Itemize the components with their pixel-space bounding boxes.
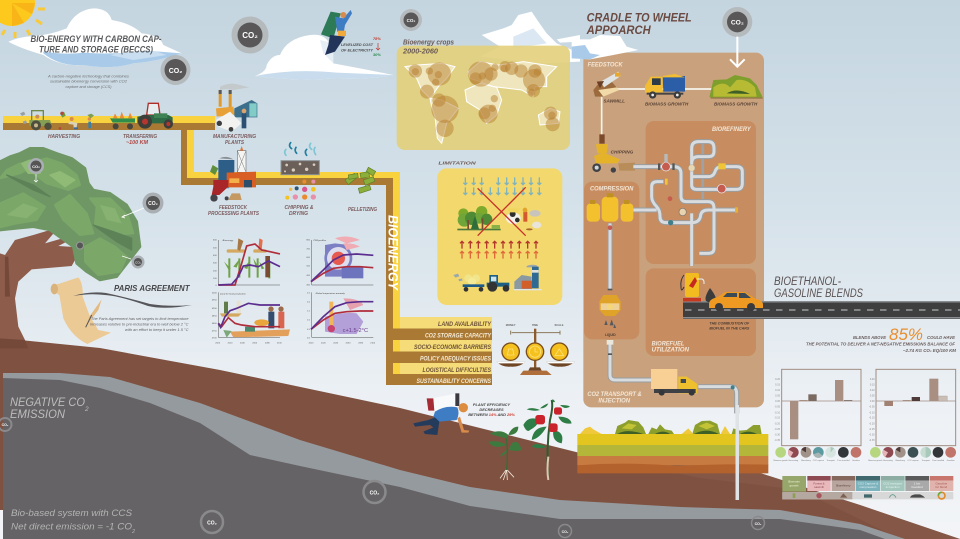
- heading: bioethanol gasoline blends: BIOETHANOL-: [774, 276, 841, 288]
- ground: soil slope: [0, 338, 960, 539]
- label: chipping: CHIPPING: [611, 149, 634, 154]
- text: blends above 85%: COULD HAVE: [927, 335, 956, 340]
- bar chart right: 0.20: [870, 378, 875, 381]
- factory: [514, 265, 542, 290]
- pie legend left: 1 km travelled: [837, 459, 850, 462]
- label: feedstock processing plants: FEEDSTOCK: [219, 205, 248, 211]
- balance scale: money, time, scale: MONEY: [506, 323, 516, 327]
- heading: negative CO2 emission: [10, 395, 89, 421]
- bar chart right: -0.05: [869, 406, 875, 409]
- heading: negative CO2 emission: NEGATIVE CO: [10, 395, 85, 409]
- bar chart right: 0.15: [870, 384, 875, 387]
- pie legend left: [774, 447, 861, 462]
- chart: global temperature anomaly: 2000: [309, 342, 314, 344]
- chart: CO2 profiles: 700: [306, 248, 311, 250]
- bar chart right: 0.00: [870, 400, 875, 403]
- chart: global temperature anomaly: 2060: [346, 342, 351, 344]
- bar chart left: -0.10: [774, 411, 781, 414]
- bars: six limitations: LOGISTICAL DIFFICULTIES: [422, 367, 491, 374]
- label: combustion: THE COMBUSTION OF: [709, 322, 750, 326]
- heading: limitation: LIMITATION: [438, 161, 476, 167]
- bar chart right: 0.05: [870, 395, 875, 398]
- heading: bioethanol gasoline blends: [774, 276, 863, 300]
- bar chart right: [869, 369, 956, 446]
- chart: bioenergy: [213, 238, 280, 287]
- CO2 bubble right of tree: [122, 192, 164, 218]
- CO2 bubbles underground: CO₂: [755, 522, 762, 526]
- chart: land for food production: 2000: [215, 342, 221, 344]
- bar chart left: 0.00: [775, 400, 781, 403]
- table of life-cycle stages: compression: [860, 485, 877, 489]
- label: biorefinery: BIOREFINERY: [712, 126, 751, 133]
- label: CO2 transport and injection: INJECTION: [598, 399, 631, 405]
- pellets icon: [345, 167, 376, 193]
- subpanel: compression: [584, 182, 639, 339]
- pie legend right: CO2 capture: [907, 459, 920, 462]
- charts: four scenario line charts: [212, 237, 376, 344]
- CO2 bubble top centre: [232, 16, 268, 54]
- label: biomass growth 1: BIOMASS GROWTH: [645, 102, 689, 107]
- ground: rock layers: [0, 373, 905, 539]
- text: plant efficiency: DECREASES: [479, 407, 504, 412]
- small CO2 bubble lower right of tree: [122, 256, 144, 268]
- small plant: [488, 427, 522, 480]
- pipe valves: [658, 154, 738, 225]
- balance scale: money, time, scale: [497, 323, 575, 375]
- cloud: levelized cost: [255, 35, 393, 80]
- panel: cradle to wheel: [583, 7, 764, 413]
- chart: global temperature anomaly: c+1.5-2°C: [343, 328, 368, 334]
- levelized cost of electricity: 78%: [373, 36, 381, 41]
- swoosh under Paris Agreement: [73, 292, 192, 308]
- tractor with hay: [453, 274, 509, 292]
- chart: bioenergy: Bioenergy: [223, 240, 234, 242]
- heading: negative CO2 emission: 2: [84, 406, 89, 413]
- bars: six limitations: SOCIO-ECONOMIC BARRIERS: [414, 344, 491, 351]
- bar chart left: -0.25: [774, 428, 781, 431]
- chart: land for food production: 4800: [212, 323, 217, 325]
- CO2 bubble on tree top: CO₂: [32, 164, 40, 169]
- CO2 bubble top of map: [400, 9, 422, 31]
- label: transfering: [123, 134, 157, 146]
- road: [683, 301, 960, 319]
- chart: land for food production: 2060: [252, 342, 258, 344]
- label: feedstock processing plants: [208, 205, 259, 217]
- table of life-cycle stages: travelled: [911, 485, 923, 489]
- CO2 bubble in branch: [76, 242, 84, 249]
- text: Paris Agreement body: increases relative to pre-industrial era to well below 2 °C: [90, 322, 189, 326]
- feedstock processing plant icon: [210, 146, 256, 202]
- text: definition: [47, 74, 129, 89]
- pipe into the ground: [736, 405, 739, 500]
- heading: bioenergy crops: [402, 40, 454, 56]
- label: combustion: [709, 322, 750, 330]
- orange car: [709, 292, 763, 311]
- harvesters: [59, 112, 94, 130]
- chart: global temperature anomaly: 1.5: [307, 311, 311, 313]
- tomato plant: [523, 399, 572, 480]
- text: blends above 85%: 85%: [889, 325, 923, 344]
- label: CO2 transport and injection: CO2 TRANSPORT &: [587, 392, 642, 398]
- levelized cost of electricity: [341, 36, 381, 57]
- label: compression: COMPRESSION: [590, 187, 634, 193]
- pie legend left: CO2 capture: [813, 459, 825, 462]
- levelized cost of electricity: OF ELECTRICITY: [341, 48, 373, 52]
- bars: six limitations: POLICY ADEQUACY ISSUES: [420, 356, 491, 362]
- chart: global temperature anomaly: 2020: [321, 342, 327, 344]
- label: chipping and drying: DRYING: [289, 211, 308, 217]
- text: plant efficiency: PLANT EFFICIENCY: [473, 402, 510, 407]
- CO2 bubble with arrow: [722, 7, 752, 67]
- label: biomass growth 2: BIOMASS GROWTH: [714, 102, 758, 107]
- bar chart left: 0.10: [775, 389, 781, 392]
- table of life-cycle stages: CO2 transport: [883, 481, 902, 485]
- chart: land for food production: 5000: [212, 293, 217, 295]
- bar chart right: -0.10: [869, 411, 875, 414]
- text: Paris Agreement body: The Paris Agreement has set targets to limit temperature: [91, 317, 188, 321]
- manufacturing plant icon: [216, 84, 257, 132]
- label: feedstock: FEEDSTOCK: [588, 62, 623, 69]
- text: Paris Agreement body: with an effort to keep it under 1.5 °C: [125, 328, 189, 332]
- text: bio-based system: [11, 508, 135, 535]
- table of life-cycle stages: [782, 476, 953, 499]
- chart: global temperature anomaly: 2.5: [307, 293, 311, 295]
- label: manufacturing plants: PLANTS: [225, 140, 244, 146]
- bar chart left: [774, 369, 861, 446]
- liquid CO2 tank: [599, 295, 621, 316]
- CO2 bubbles underground: [0, 418, 764, 538]
- crawling man with heavy pack: [413, 393, 469, 435]
- small tractor: [20, 111, 52, 130]
- tree: [0, 148, 140, 348]
- CO2 bubble on tree top: [28, 158, 44, 182]
- label: harvesting: HARVESTING: [48, 134, 80, 140]
- chart: CO2 profiles: 300: [306, 284, 311, 286]
- heading: bioethanol gasoline blends: GASOLINE BLENDS: [774, 288, 863, 300]
- sawmill icon: [593, 72, 621, 97]
- bar chart left: -0.20: [774, 422, 781, 425]
- table of life-cycle stages: Forest &: [813, 481, 825, 485]
- bar chart left: 0.15: [775, 384, 781, 387]
- CO2 bubbles underground: CO₂: [370, 490, 379, 496]
- chart: global temperature anomaly: 2.0: [307, 302, 311, 304]
- label: biorefuel utilization: UTILIZATION: [652, 347, 690, 353]
- label: transfering: ~100 KM: [126, 140, 149, 146]
- CO2 bubbles underground: CO₂: [207, 520, 217, 526]
- CO2 pipe to tank: [608, 223, 612, 290]
- balance scale: money, time, scale: SCALE: [554, 323, 564, 327]
- chart: global temperature anomaly: 0.5: [307, 329, 311, 331]
- label: manufacturing plants: MANUFACTURING: [213, 134, 256, 140]
- CO2 bubbles underground: CO₂: [2, 423, 9, 427]
- bar chart left: -0.05: [774, 406, 781, 409]
- table of life-cycle stages: CO2 Capture &: [858, 481, 878, 485]
- heading: negative CO2 emission: EMISSION: [10, 407, 65, 421]
- big tractor with trailer: [110, 103, 173, 129]
- chart: land for food production: [212, 292, 290, 344]
- oil drop: [706, 288, 716, 302]
- chart: land for food production: 4950: [212, 300, 217, 302]
- bar chart left: -0.15: [774, 417, 781, 420]
- heading: CRADLE TO WHEEL: [587, 11, 692, 25]
- table of life-cycle stages: Gasoline: [935, 481, 948, 485]
- subpanel: biorefinery: [646, 121, 756, 264]
- CO2 bubbles underground: CO₂: [562, 530, 569, 534]
- text: plant efficiency: [468, 402, 515, 417]
- chart: global temperature anomaly: 2040: [333, 342, 339, 344]
- chart: global temperature anomaly: [307, 292, 376, 344]
- dump truck: [645, 74, 685, 99]
- bar chart left: 0.05: [775, 395, 781, 398]
- chart: land for food production: 2020: [228, 342, 233, 344]
- text: blends above 85%: THE POTENTIAL TO DELIVER A NET-NEGATIVE EMISSIONS BALANCE OF: [806, 342, 955, 346]
- text: definition: A carbon-negative technology that combines: [47, 74, 129, 78]
- biomass pipeline: horizontal and vertical: [3, 116, 400, 385]
- bars: six limitations: [386, 317, 492, 385]
- chart: land for food production: 4750: [212, 330, 217, 332]
- CO2 bubble top of map: CO₂: [407, 18, 415, 23]
- chart: bioenergy: 400: [213, 255, 217, 257]
- CO2 bubble below title: CO₂: [169, 68, 182, 75]
- title: TURE AND STORAGE (BECCS): [39, 44, 153, 54]
- chart: land for food production: 4700: [212, 337, 217, 339]
- table of life-cycle stages: growth: [790, 483, 799, 487]
- levelized cost of electricity: LEVELIZED COST: [341, 42, 374, 47]
- table of life-cycle stages: 1 km: [914, 481, 921, 485]
- text: bio-based system: 2: [131, 529, 135, 535]
- label: feedstock processing plants: PROCESSING PLANTS: [208, 211, 259, 217]
- bar chart right: -0.25: [869, 428, 875, 431]
- CO2 bubble below title: [160, 55, 190, 85]
- crop bubbles: [409, 61, 560, 137]
- red arrows up: [460, 241, 538, 259]
- chipping machine: [592, 134, 635, 173]
- chart: global temperature anomaly: 2100: [370, 342, 376, 344]
- bars: six limitations: SUSTAINABILITY CONCERNS: [416, 378, 491, 385]
- chart: global temperature anomaly: Global temperature anomaly: [316, 292, 346, 295]
- heading: Paris Agreement: PARIS AGREEMENT: [114, 283, 190, 293]
- heading: bioenergy crops: Bioenergy crops: [403, 40, 454, 46]
- small CO2 bubble lower right of tree: CO₂: [135, 260, 142, 264]
- table of life-cycle stages: Biorefinery: [836, 484, 851, 488]
- bars: six limitations: LAND AVAILABILITY: [438, 321, 491, 328]
- text: blends above 85%: –2.74 KG CO₂ EQ/100 KM: [903, 348, 956, 353]
- chipping and drying icon: [281, 143, 319, 200]
- pie legend right: Biorefinery: [896, 459, 905, 462]
- CO2 bubble with arrow: CO₂: [731, 20, 744, 27]
- pie legend right: [868, 447, 956, 462]
- text: bio-based system: Bio-based system with CCS: [11, 508, 133, 519]
- label: pelletizing: PELLETIZING: [348, 207, 377, 213]
- stage icons: [793, 492, 945, 499]
- label: combustion: BIOFUEL IN THE CARS: [709, 326, 750, 330]
- chart: land for food production: 2100: [277, 342, 283, 344]
- label: manufacturing plants: [213, 134, 256, 146]
- bar chart left: -0.30: [774, 433, 781, 436]
- cloud near cradle heading: [572, 35, 638, 59]
- bar chart right: 0.10: [870, 389, 875, 392]
- pie legend right: Biomass growth: [868, 459, 882, 462]
- soil profile: [577, 420, 768, 473]
- table of life-cycle stages: & injection: [886, 485, 900, 489]
- text: Paris Agreement body: [90, 317, 189, 332]
- pie legend right: Harvesting: [883, 459, 893, 462]
- bar chart right: -0.20: [869, 422, 875, 425]
- balance scale: money, time, scale: TIME: [532, 323, 538, 327]
- label: liquid: LIQUID: [605, 333, 616, 337]
- label: sawmill: SAWMILL: [603, 98, 625, 103]
- chart: CO2 profiles: 500: [306, 266, 311, 268]
- pie legend left: Biorefinery: [801, 459, 811, 462]
- chart: bioenergy: 0: [215, 285, 217, 287]
- liquid drops: [604, 319, 616, 328]
- text: bio-based system: Net direct emission = -1 CO: [11, 522, 133, 532]
- red cross: [478, 187, 526, 236]
- text: blends above 85%: BLENDS ABOVE: [853, 335, 887, 340]
- levelized cost of electricity: 30%: [373, 52, 381, 57]
- title: BIO-ENERGY WITH CARBON CAP-: [30, 34, 162, 44]
- text: definition: sustainable bioenergy conversion with CO2: [50, 80, 127, 84]
- animals: [506, 208, 541, 230]
- chart: global temperature anomaly: 0.0: [307, 337, 311, 339]
- forest: [457, 206, 501, 230]
- chart: bioenergy: 500: [213, 247, 217, 249]
- heading: bioenergy crops: 2000-2060: [402, 48, 438, 56]
- world map land: [405, 62, 560, 143]
- table of life-cycle stages: sawmill: [814, 485, 824, 489]
- chart: CO2 profiles: 600: [306, 257, 311, 259]
- bar chart left: 0.20: [775, 378, 781, 381]
- bar chart right: -0.30: [869, 433, 875, 436]
- label: biorefuel utilization: BIOREFUEL: [652, 342, 685, 348]
- pie legend left: Transport: [826, 459, 835, 462]
- chart: land for food production: 4900: [212, 308, 217, 310]
- vertical label: bioenergy: BIOENERGY: [386, 215, 400, 292]
- label: biorefuel utilization: [652, 342, 690, 353]
- chart: CO2 profiles: 800: [306, 240, 311, 242]
- cloud: right of map: [480, 12, 580, 63]
- chart: CO2 profiles: CO2 profiles: [313, 240, 327, 242]
- fuel pump: [681, 273, 704, 302]
- pipes: biorefinery network: [633, 142, 742, 266]
- CO2 bubble top centre: CO₂: [242, 31, 258, 40]
- panel: cradle to wheel: APPOARCH: [586, 23, 651, 37]
- chart: land for food production: 4850: [212, 316, 217, 318]
- pie legend right: Gasoline: [947, 460, 955, 462]
- pie legend left: Biomass growth: [774, 459, 788, 462]
- bar chart right: -0.35: [869, 439, 875, 442]
- label: transfering: TRANSFERING: [123, 134, 157, 140]
- table of life-cycle stages: for blend: [936, 485, 947, 489]
- chart: bioenergy: 300: [213, 263, 217, 265]
- chart: land for food production: 2040: [240, 342, 246, 344]
- emissions balance charts and legend: [774, 369, 956, 499]
- text: plant efficiency: BETWEEN 14% AND 29%: [468, 412, 515, 417]
- chart: bioenergy: 200: [213, 270, 217, 272]
- chart: CO2 profiles: 400: [306, 275, 311, 277]
- title: [30, 34, 162, 54]
- CO2 bubble right of tree: CO₂: [148, 201, 158, 207]
- delivery truck: [651, 369, 697, 396]
- chart: bioenergy: 600: [213, 240, 217, 242]
- blue arrows down: [463, 177, 541, 195]
- pie legend right: Transport: [921, 459, 930, 462]
- chart: global temperature anomaly: 1.0: [307, 320, 311, 322]
- chart: global temperature anomaly: 2080: [358, 342, 364, 344]
- pie legend left: Harvesting: [789, 459, 798, 462]
- text: blends above 85%: [806, 325, 956, 353]
- chart: land for food production: Land for food production: [220, 292, 246, 295]
- flow lines: [602, 89, 712, 135]
- bars: six limitations: CO2 STORAGE CAPACITY: [425, 332, 491, 340]
- Paris agreement scroll: [51, 277, 111, 344]
- table of life-cycle stages: Biomass: [788, 480, 800, 484]
- bar chart right: -0.15: [869, 417, 875, 420]
- panel: limitation: [437, 161, 562, 305]
- gas cylinders: [587, 193, 633, 222]
- chart: CO2 profiles: [306, 237, 373, 286]
- chart: bioenergy: 100: [213, 278, 217, 280]
- text: definition: capture and storage (CCS): [66, 85, 112, 89]
- panel: bioenergy crops map: [397, 46, 570, 150]
- pie legend right: 1 km travelled: [932, 459, 944, 462]
- CO2 delivery pipe: [607, 340, 737, 413]
- label: CO2 transport and injection: [587, 392, 642, 405]
- man with jetpack: [321, 10, 352, 55]
- bar chart left: -0.35: [774, 439, 781, 442]
- subpanel: biorefuel utilization: [646, 268, 756, 356]
- label: chipping and drying: [284, 205, 314, 217]
- biomass bushes: [709, 75, 763, 99]
- label: chipping and drying: CHIPPING &: [284, 205, 314, 211]
- cloud: title: [8, 8, 182, 67]
- sun: [0, 0, 45, 38]
- chart: land for food production: 2080: [265, 342, 271, 344]
- pie legend left: Gasoline: [852, 460, 861, 462]
